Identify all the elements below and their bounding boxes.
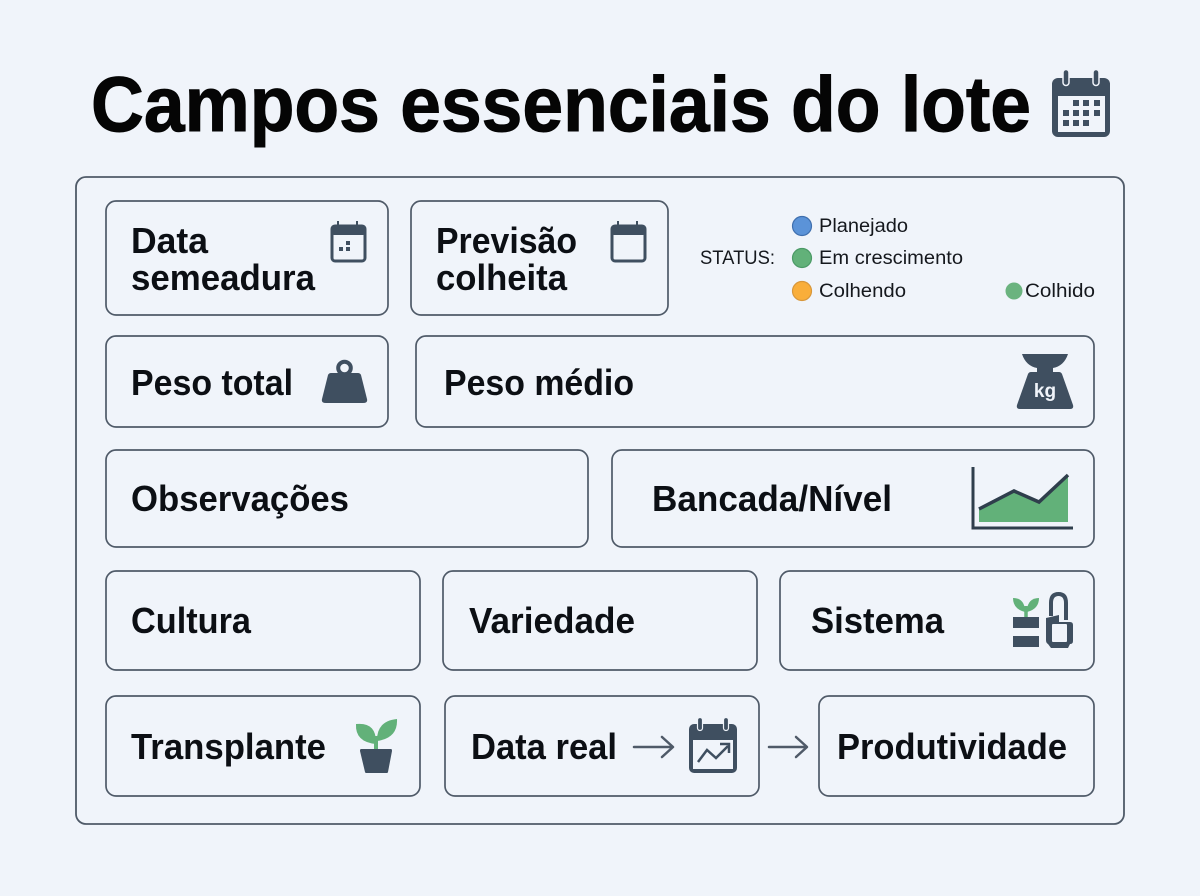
- icon: calendar with dots: [331, 221, 366, 261]
- card: Variedade: Variedade: [469, 600, 635, 641]
- card: Previsão colheita: Previsão: [436, 220, 577, 261]
- arrow: to Produtividade: [769, 737, 807, 757]
- icon: potted plant: [356, 719, 397, 773]
- legend: status: STATUS:: [700, 248, 775, 269]
- card: Bancada/Nível: [612, 450, 1094, 547]
- card: Observações: [106, 450, 588, 547]
- icon: kg scale: kg: [1034, 381, 1056, 402]
- card: Previsão colheita: [411, 201, 668, 315]
- card: Bancada/Nível: Bancada/Nível: [652, 478, 892, 519]
- legend: status: Planejado: [819, 216, 908, 237]
- card: Data semeadura: [106, 201, 388, 315]
- card: Sistema: [780, 571, 1094, 670]
- card: Produtividade: Produtividade: [837, 726, 1067, 767]
- icon: large calendar: [1052, 70, 1110, 137]
- card: Peso total: Peso total: [131, 362, 293, 403]
- icon: area chart: [973, 467, 1073, 528]
- icon: weight: [322, 362, 367, 403]
- icon: kg scale: [1017, 354, 1073, 409]
- card: Cultura: [106, 571, 420, 670]
- card: Previsão colheita: colheita: [436, 257, 568, 298]
- legend: status: [700, 216, 1095, 302]
- icon: empty calendar: [611, 221, 646, 261]
- legend: status: Colhendo: [819, 281, 906, 302]
- card: Peso total: [106, 336, 388, 427]
- legend: status: Colhido: [1025, 281, 1095, 302]
- icon: calendar with trend: [689, 718, 737, 773]
- card: Cultura: Cultura: [131, 600, 252, 641]
- card: Data semeadura: Data: [131, 220, 209, 261]
- card: Variedade: [443, 571, 757, 670]
- card: Data real: Data real: [471, 726, 617, 767]
- card: Produtividade: [819, 696, 1094, 796]
- card: Data semeadura: semeadura: [131, 257, 316, 298]
- card: Peso médio: [416, 336, 1094, 427]
- card: Observações: Observações: [131, 478, 349, 519]
- card: Sistema: Sistema: [811, 600, 945, 641]
- legend: status: Em crescimento: [819, 248, 963, 269]
- card: Data real: [445, 696, 759, 796]
- card: Transplante: Transplante: [131, 726, 326, 767]
- panel: outer frame: [76, 177, 1124, 824]
- arrow: to calendar: [634, 737, 673, 757]
- icon: system: [1013, 594, 1073, 648]
- card: Peso médio: Peso médio: [444, 362, 634, 403]
- card: Transplante: [106, 696, 420, 796]
- title: Campos essenciais do lote: [91, 60, 1031, 148]
